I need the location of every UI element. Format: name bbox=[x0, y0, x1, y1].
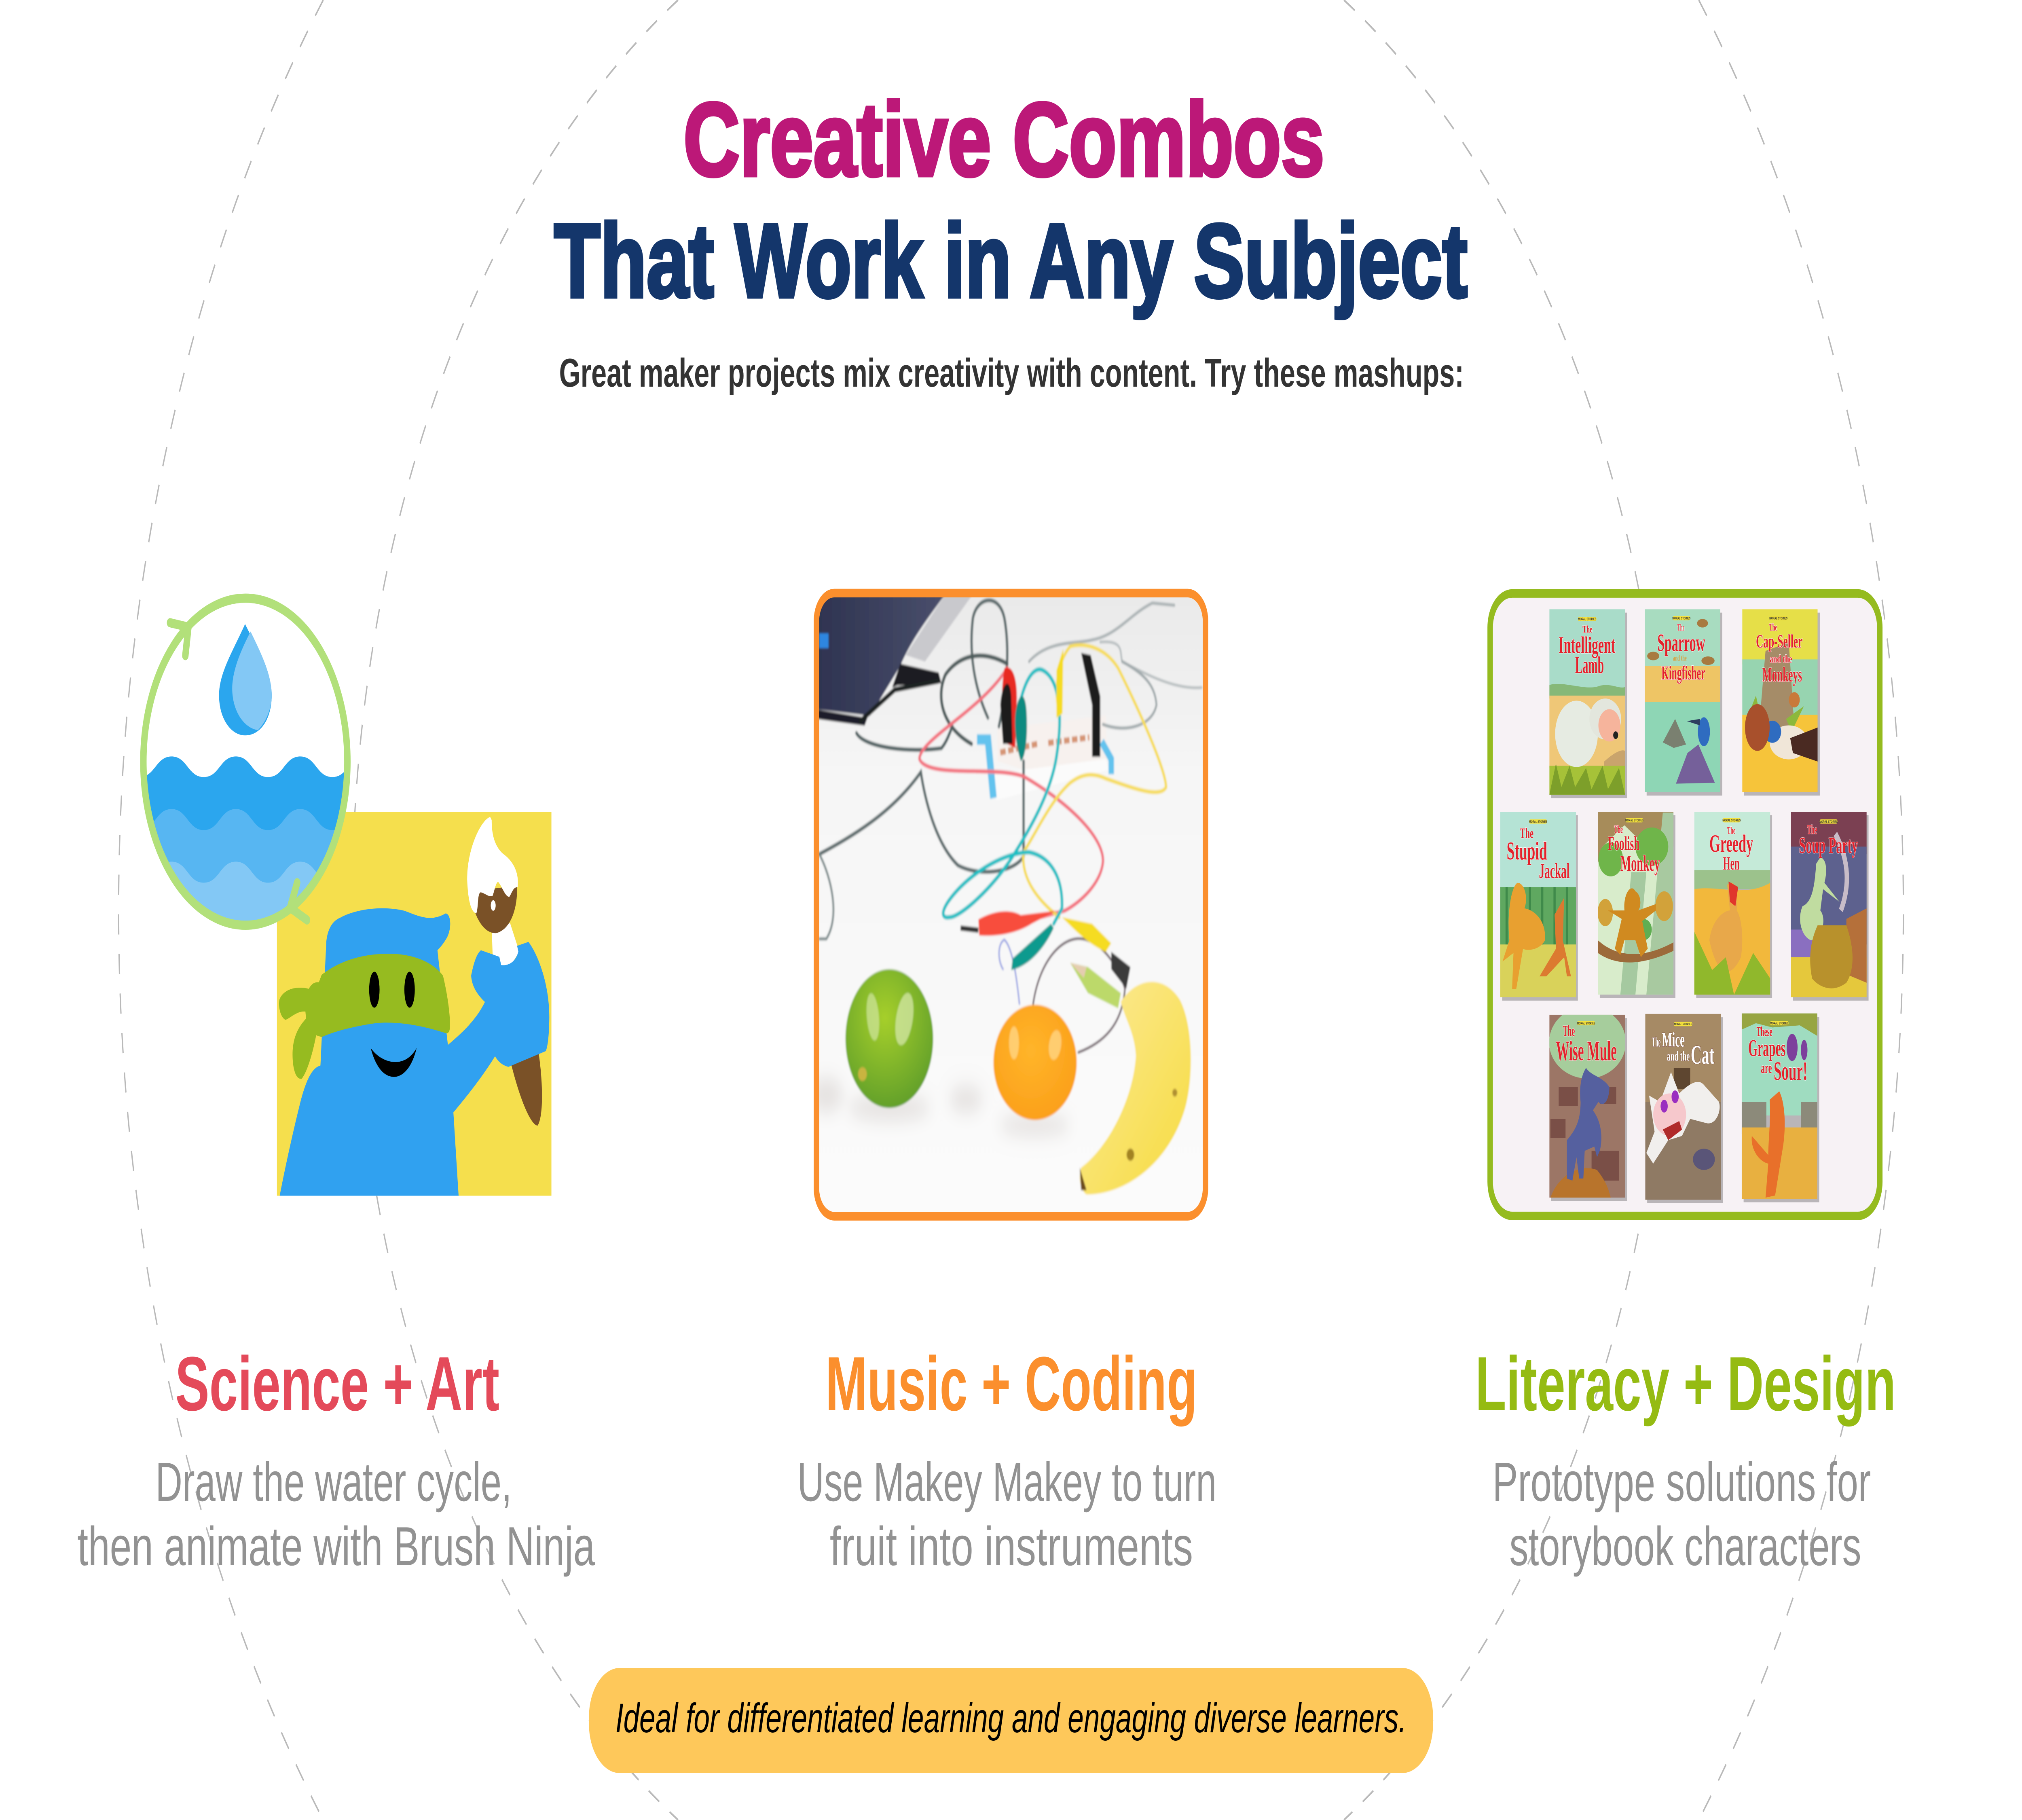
paintbrush head bbox=[476, 886, 517, 933]
column: literacy + design text bbox=[1475, 1341, 1896, 1577]
green framed background bbox=[1490, 593, 1880, 1216]
ninja body bbox=[280, 908, 549, 1196]
panel: science + art illustration bbox=[132, 598, 552, 1196]
wires bbox=[819, 600, 1201, 1052]
description: music + coding bbox=[797, 1452, 1216, 1577]
book: The Intelligent Lamb: Intelligent bbox=[1559, 632, 1616, 658]
book: The Sparrow and the Kingfisher bbox=[1645, 609, 1722, 796]
book: The Sparrow and the Kingfisher: Kingfisher bbox=[1661, 662, 1705, 684]
book: The Stupid Jackal bbox=[1500, 812, 1578, 1001]
book: The Greedy Hen: Greedy bbox=[1709, 830, 1753, 857]
book: The Mice and the Cat: MORAL STORIES bbox=[1674, 1023, 1692, 1026]
description: literacy + design: storybook characters bbox=[1510, 1516, 1861, 1577]
book: The Mice and the Cat: and the bbox=[1667, 1049, 1690, 1064]
book: The Sparrow and the Kingfisher: Sparrow bbox=[1657, 629, 1705, 657]
orange bbox=[994, 1005, 1077, 1120]
column: music + coding text bbox=[797, 1341, 1216, 1577]
description: science + art: then animate with Brush Ninja bbox=[77, 1516, 595, 1577]
book: The Cap-Seller and the Monkeys: and the bbox=[1770, 653, 1792, 665]
book: The Intelligent Lamb bbox=[1549, 609, 1627, 798]
book: These Grapes are Sour: are bbox=[1761, 1060, 1772, 1076]
alligator clips bbox=[960, 649, 1130, 989]
description: science + art bbox=[77, 1452, 595, 1577]
title bbox=[554, 81, 1468, 319]
heading: literacy + design: Literacy + Design bbox=[1475, 1341, 1896, 1427]
book: The Greedy Hen: MORAL STORIES bbox=[1722, 819, 1741, 823]
book: The Greedy Hen: Hen bbox=[1723, 853, 1740, 874]
book: The Soup Party: The bbox=[1807, 822, 1817, 837]
panel: makey makey fruit photo bbox=[810, 588, 1210, 1221]
book: The Greedy Hen bbox=[1694, 812, 1772, 998]
book: These Grapes are Sour: MORAL STORIES bbox=[1770, 1022, 1788, 1025]
laptop bbox=[815, 592, 974, 726]
ninja headband bbox=[279, 954, 450, 1079]
lime bbox=[846, 969, 933, 1108]
book: The Greedy Hen: The bbox=[1727, 825, 1735, 836]
ninja smile bbox=[371, 1048, 417, 1077]
book: The Foolish Monkey: MORAL STORIES bbox=[1625, 819, 1643, 823]
paintbrush handle bbox=[492, 923, 519, 967]
title line 1: Creative Combos bbox=[683, 81, 1324, 198]
book: The Sparrow and the Kingfisher: The bbox=[1677, 623, 1684, 633]
book: The Mice and the Cat: Cat bbox=[1691, 1040, 1715, 1069]
book: The Stupid Jackal: Stupid bbox=[1507, 837, 1547, 865]
book: The Stupid Jackal: The bbox=[1520, 825, 1533, 842]
book: The Wise Mule: The bbox=[1563, 1022, 1575, 1039]
cycle ring and arrows bbox=[144, 598, 347, 925]
fruit shadows bbox=[810, 1077, 1070, 1136]
callout text: Ideal for differentiated learning and engaging diverse learners. bbox=[615, 1695, 1407, 1742]
book: The Foolish Monkey: The bbox=[1614, 823, 1623, 836]
book: The Sparrow and the Kingfisher: and the bbox=[1673, 653, 1687, 662]
book: The Mice and the Cat bbox=[1645, 1014, 1723, 1203]
description: music + coding: fruit into instruments bbox=[830, 1516, 1193, 1577]
book: The Foolish Monkey: Monkey bbox=[1620, 851, 1660, 876]
book: The Foolish Monkey bbox=[1598, 812, 1675, 998]
makey makey board bbox=[976, 733, 1115, 800]
column: science + art text bbox=[77, 1341, 595, 1577]
book: The Cap-Seller and the Monkeys: Monkeys bbox=[1762, 664, 1802, 686]
book: The Cap-Seller and the Monkeys: Cap-Seller bbox=[1756, 631, 1802, 652]
title line 2: That Work in Any Subject bbox=[554, 202, 1468, 319]
book: The Cap-Seller and the Monkeys bbox=[1742, 609, 1820, 796]
book: The Intelligent Lamb: MORAL STORIES bbox=[1578, 618, 1596, 621]
book: The Wise Mule bbox=[1549, 1006, 1627, 1201]
banana bbox=[1070, 963, 1191, 1195]
heading: music + coding: Music + Coding bbox=[825, 1341, 1197, 1427]
book: The Wise Mule: MORAL STORIES bbox=[1577, 1022, 1595, 1025]
yellow ninja card bbox=[277, 812, 552, 1196]
book: The Stupid Jackal: MORAL STORIES bbox=[1529, 820, 1547, 824]
description: music + coding: Use Makey Makey to turn bbox=[797, 1452, 1216, 1513]
book: The Cap-Seller and the Monkeys: MORAL STORIES bbox=[1769, 617, 1787, 620]
description: literacy + design bbox=[1493, 1452, 1871, 1577]
panel: storybook covers bbox=[1490, 593, 1880, 1216]
book: These Grapes are Sour bbox=[1742, 1014, 1819, 1202]
book: The Mice and the Cat: Mice bbox=[1662, 1029, 1685, 1052]
book: These Grapes are Sour: These bbox=[1756, 1024, 1772, 1039]
book: The Cap-Seller and the Monkeys: The bbox=[1769, 621, 1777, 633]
book: The Soup Party: MORAL STORIES bbox=[1819, 820, 1838, 824]
callout pill bbox=[589, 1668, 1433, 1773]
description: literacy + design: Prototype solutions for bbox=[1493, 1452, 1871, 1513]
ninja eyes bbox=[369, 972, 415, 1007]
book: These Grapes are Sour: Sour! bbox=[1774, 1056, 1807, 1086]
heading: science + art: Science + Art bbox=[175, 1341, 499, 1427]
book: The Intelligent Lamb: The bbox=[1582, 624, 1593, 635]
book: The Foolish Monkey: Foolish bbox=[1608, 833, 1639, 854]
water cycle badge bbox=[140, 594, 351, 930]
book: The Intelligent Lamb: Lamb bbox=[1575, 652, 1604, 678]
book: These Grapes are Sour: Grapes bbox=[1748, 1035, 1785, 1061]
orange photo frame bbox=[816, 593, 1206, 1216]
subtitle: Great maker projects mix creativity with content. Try these mashups: bbox=[559, 351, 1464, 396]
book: The Sparrow and the Kingfisher: MORAL STORIES bbox=[1672, 617, 1690, 620]
description: science + art: Draw the water cycle, bbox=[155, 1452, 512, 1513]
book: The Mice and the Cat: The bbox=[1652, 1035, 1660, 1050]
book: The Stupid Jackal: Jackal bbox=[1539, 859, 1569, 883]
book: The Soup Party bbox=[1791, 812, 1869, 1001]
icon: water drop bbox=[219, 624, 272, 735]
